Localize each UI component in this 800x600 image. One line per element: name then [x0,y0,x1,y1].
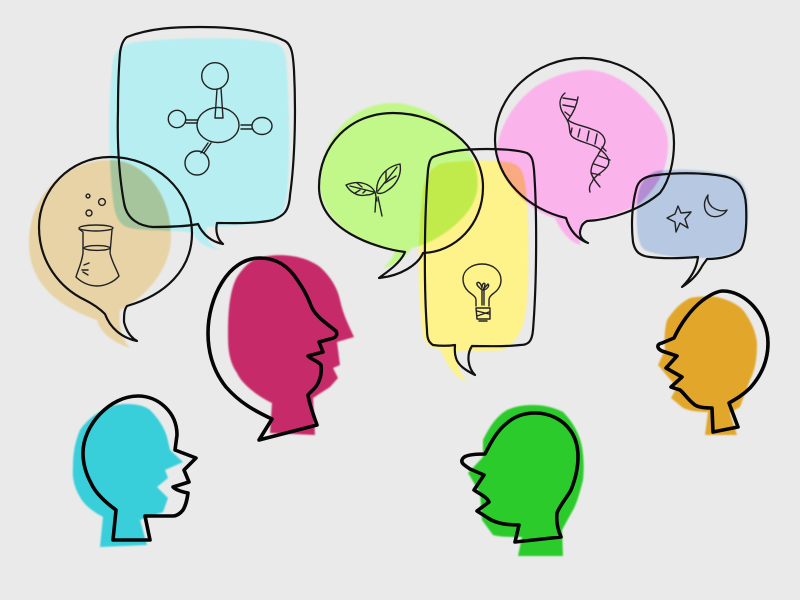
icon: moon [704,195,727,217]
bubble: sprout [319,113,483,278]
bubble: DNA [495,58,674,243]
bubble: molecule [118,27,295,244]
fill: molecule bubble [109,38,289,250]
bubble outline: star and moon [632,173,746,287]
head outline: green head [462,413,578,542]
fill: orange head [658,296,757,435]
icon: molecule [168,63,272,175]
bubble: star and moon [632,173,746,287]
fill: sprout bubble [320,103,478,268]
bubble outline: lightbulb [425,149,536,375]
bubble outline: sprout [319,113,483,278]
icon: star [667,206,691,232]
fill: green head [468,405,584,556]
fill: magenta head [228,255,354,435]
fill: star and moon bubble [637,170,748,258]
bubble: flask [39,157,192,341]
head silhouette fills [73,255,757,556]
fill: lightbulb bubble [419,161,528,382]
bubble: lightbulb [425,149,536,375]
icon: sprout [346,164,400,216]
bubble outline: DNA [495,58,674,243]
fill: flask bubble [29,160,171,348]
head outline: magenta head [208,258,337,440]
icon: DNA helix [560,93,610,192]
fill: DNA bubble [497,70,668,245]
bubble outline: molecule [118,27,295,244]
head outline: orange head [658,291,768,432]
bubble outline: flask [39,157,192,341]
icon: flask and bubbles [76,194,119,286]
speech bubble colour fills [29,38,748,382]
icon: lightbulb [463,264,501,321]
fill: cyan head [73,404,183,547]
head outline: cyan head [83,396,196,540]
